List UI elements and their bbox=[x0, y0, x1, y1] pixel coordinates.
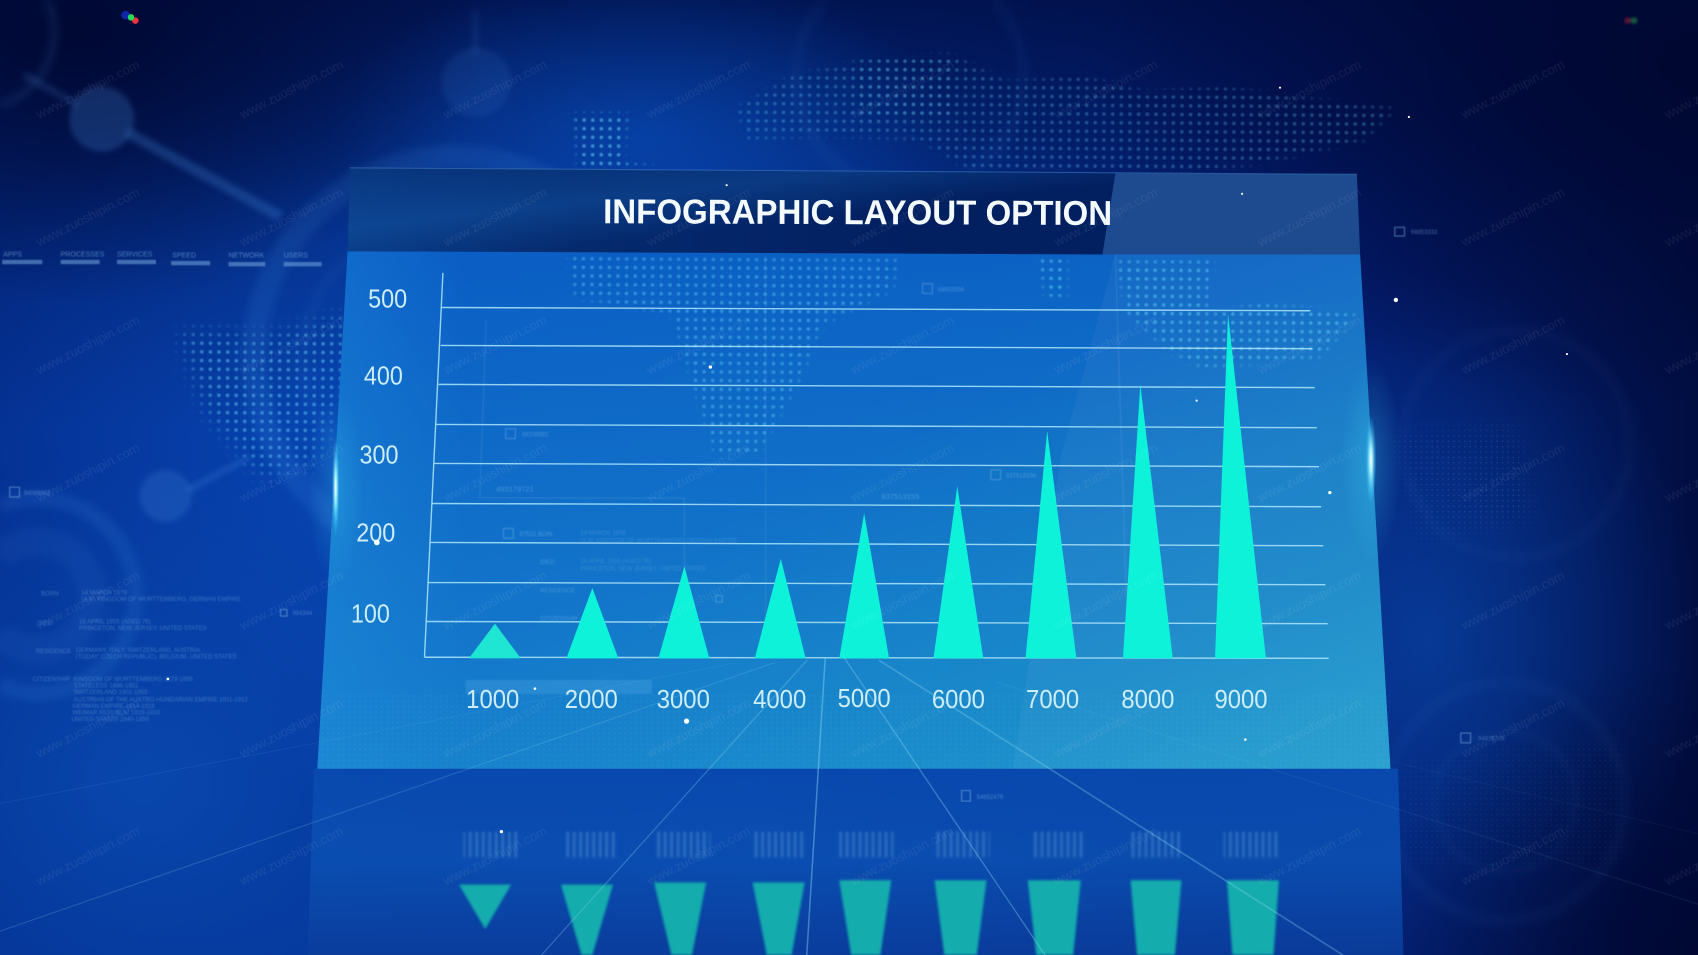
world map: upper dots bbox=[574, 52, 1392, 169]
biography text block left: BORN bbox=[41, 592, 59, 598]
inner panel hud details: 837513156 bbox=[1006, 474, 1036, 479]
biography text block left: GERMAN EMPIRE 1914-1918 bbox=[73, 704, 155, 710]
inner panel hud details: CITIZENSHIP bbox=[540, 616, 577, 622]
panel body bbox=[317, 251, 1390, 769]
inner panel hud details: 68853356 bbox=[938, 287, 965, 293]
bar 2000 bbox=[566, 588, 618, 658]
x axis labels: 9000 bbox=[1214, 684, 1268, 714]
biography text block left: 18 APRIL 1955 (AGED 76) bbox=[79, 620, 151, 626]
chart gridlines and axes bbox=[424, 273, 1329, 658]
inner panel hud details: 89206982 bbox=[522, 432, 548, 438]
perspective floor lines bbox=[0, 658, 1698, 955]
reflected triangles bbox=[459, 880, 1279, 955]
bar 7000 bbox=[1026, 431, 1076, 658]
small hud tags outside panel: 94089802 bbox=[24, 491, 50, 497]
biography text block left: ULM, KINGDOM OF WURTTEMBERG, GERMAN EMPIRE bbox=[81, 597, 241, 603]
inner panel hud details: 493179721 bbox=[496, 485, 534, 494]
left edge lens flare bbox=[308, 390, 364, 585]
data menu: apps processes services speed network users: NETWORK bbox=[228, 253, 265, 260]
data menu: apps processes services speed network users: SPEED bbox=[172, 253, 196, 260]
small hud tags outside panel: 68853333 bbox=[1411, 230, 1438, 236]
floor tag bbox=[962, 790, 1004, 801]
bar 6000 bbox=[933, 486, 983, 658]
faint chroma dot top right bbox=[1624, 17, 1637, 24]
triangle bars bbox=[469, 314, 1266, 658]
x axis labels: 1000 bbox=[466, 684, 519, 714]
biography text block left: STATELESS 1896-1901 bbox=[74, 684, 139, 690]
y axis labels: 300 bbox=[360, 439, 399, 469]
biography text block left: DIED bbox=[38, 621, 53, 627]
inner panel hud details: PRINCETON, NEW JERSEY, UNITED STATES bbox=[580, 567, 706, 573]
y axis labels: 100 bbox=[351, 599, 390, 629]
biography text block left: 14 MARCH 1879 bbox=[81, 590, 128, 596]
x axis labels: 5000 bbox=[838, 683, 891, 713]
y axis labels: 200 bbox=[356, 517, 395, 547]
biography text block left: WEIMAR REPUBLIC 1919-1933 bbox=[73, 711, 161, 717]
biography text block left: RESIDENCE bbox=[36, 649, 71, 655]
small hud tags outside panel: 94926278 bbox=[1478, 737, 1505, 743]
x axis labels: 4000 bbox=[753, 684, 806, 714]
rgb chromatic dot top left bbox=[121, 11, 139, 24]
biography text block left bbox=[32, 590, 248, 723]
x axis labels: 7000 bbox=[1026, 684, 1079, 714]
inner panel hud details bbox=[466, 254, 1128, 694]
data menu: apps processes services speed network users: SERVICES bbox=[117, 252, 153, 259]
data menu: apps processes services speed network users bbox=[2, 252, 322, 266]
biography text block left: SWITZERLAND 1901-1955 bbox=[74, 690, 148, 696]
inner panel hud details: 14 MARCH 1879 bbox=[580, 531, 626, 537]
x axis labels bbox=[466, 683, 1268, 714]
panel map dots bbox=[567, 256, 1356, 452]
x axis labels: 3000 bbox=[657, 684, 710, 714]
y axis labels: 400 bbox=[364, 360, 403, 390]
floor tag: 54652479 bbox=[977, 795, 1004, 801]
world map: left dots bbox=[174, 308, 343, 483]
biography text block left: KINGDOM OF WURTTEMBERG 1879-1896 bbox=[74, 677, 193, 683]
inner panel hud details: DIED bbox=[540, 560, 555, 566]
data menu: apps processes services speed network users: USERS bbox=[284, 253, 308, 260]
biography text block left: GERMANY, ITALY, SWITZERLAND, AUSTRIA bbox=[76, 648, 201, 654]
inner panel hud details: ULM, KINGDOM OF WURTTEMBERG, GERMAN EMPIRE bbox=[580, 538, 737, 544]
header band bbox=[348, 168, 1360, 254]
inner panel hud details: 837513155 bbox=[881, 492, 919, 501]
sparkle dots bbox=[167, 87, 1568, 833]
reflected axis labels bbox=[463, 832, 1278, 858]
main glass panel bbox=[317, 251, 1390, 769]
network nodes top left bbox=[22, 11, 511, 522]
x axis labels: 2000 bbox=[565, 684, 618, 714]
biography text block left: UNITED STATES 1940-1955 bbox=[71, 717, 150, 723]
inner panel hud details: RESIDENCE bbox=[540, 588, 575, 594]
inner panel hud details: 18 APRIL 1955 (AGED 76) bbox=[580, 559, 651, 565]
biography text block left: AUSTRIAN OF THE AUSTRO-HUNGARIAN EMPIRE 1911-1912 bbox=[74, 698, 248, 704]
biography text block left: PRINCETON, NEW JERSEY, UNITED STATES bbox=[79, 626, 207, 632]
data menu: apps processes services speed network users: PROCESSES bbox=[61, 252, 105, 259]
inner panel hud details: 87531 BOIN bbox=[520, 532, 552, 538]
world map: right dots bbox=[1394, 424, 1622, 864]
title: INFOGRAPHIC LAYOUT OPTION bbox=[603, 193, 1112, 233]
biography text block left: (TODAY: CZECH REPUBLIC), BELGIUM, UNITED STATES bbox=[76, 654, 237, 660]
x axis labels: 8000 bbox=[1121, 684, 1174, 714]
data menu: apps processes services speed network users: APPS bbox=[3, 252, 22, 259]
bar 9000 bbox=[1215, 314, 1266, 658]
bar 4000 bbox=[755, 559, 806, 658]
bar 3000 bbox=[658, 566, 709, 658]
panel lighter facet bbox=[1013, 254, 1390, 769]
small hud tags outside panel bbox=[10, 227, 1505, 743]
right edge lens flare bbox=[1341, 357, 1401, 563]
bar 1000 bbox=[469, 624, 521, 658]
small hud tags outside panel: 984394 bbox=[292, 611, 313, 617]
bar 5000 bbox=[839, 513, 889, 658]
y axis labels bbox=[351, 284, 407, 629]
bar 8000 bbox=[1123, 384, 1173, 658]
panel lower dot grid bbox=[317, 693, 1389, 769]
biography text block left: CITIZENSHIP bbox=[32, 677, 70, 683]
y axis labels: 500 bbox=[368, 284, 407, 314]
x axis labels: 6000 bbox=[932, 684, 985, 714]
reflection panel on floor bbox=[308, 769, 1403, 955]
header right facet bbox=[1102, 173, 1360, 254]
